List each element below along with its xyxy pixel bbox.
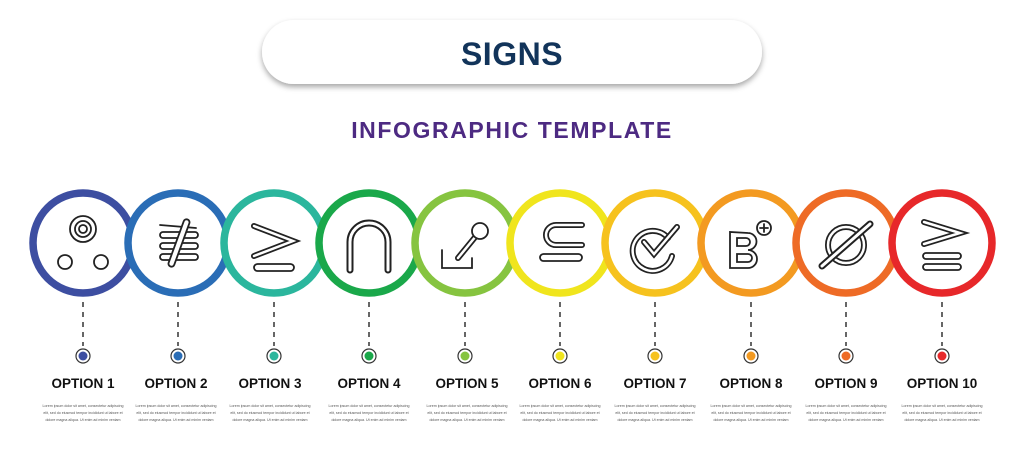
description texts: dolore magna aliqua. Ut enim ad minim veniam bbox=[331, 418, 407, 422]
option labels: OPTION 5 bbox=[435, 376, 499, 391]
description texts: dolore magna aliqua. Ut enim ad minim veniam bbox=[232, 418, 308, 422]
description texts: dolore magna aliqua. Ut enim ad minim veniam bbox=[713, 418, 789, 422]
description texts: dolore magna aliqua. Ut enim ad minim veniam bbox=[429, 418, 505, 422]
option labels: OPTION 8 bbox=[719, 376, 783, 391]
description texts: elit, sed do eiusmod tempor incididunt ut labore et bbox=[711, 411, 791, 415]
description texts: Lorem ipsum dolor sit amet, consectetur adipiscing bbox=[230, 404, 310, 408]
description texts: Lorem ipsum dolor sit amet, consectetur adipiscing bbox=[902, 404, 982, 408]
description texts: elit, sed do eiusmod tempor incididunt ut labore et bbox=[329, 411, 409, 415]
description texts: dolore magna aliqua. Ut enim ad minim veniam bbox=[522, 418, 598, 422]
icon 3: greater or equal bbox=[254, 226, 294, 271]
connectors and dots bbox=[76, 302, 949, 363]
description texts: Lorem ipsum dolor sit amet, consectetur adipiscing bbox=[136, 404, 216, 408]
description texts: Lorem ipsum dolor sit amet, consectetur adipiscing bbox=[711, 404, 791, 408]
description texts: Lorem ipsum dolor sit amet, consectetur adipiscing bbox=[427, 404, 507, 408]
option labels: OPTION 2 bbox=[144, 376, 208, 391]
description texts: dolore magna aliqua. Ut enim ad minim veniam bbox=[617, 418, 693, 422]
description texts: elit, sed do eiusmod tempor incididunt ut labore et bbox=[806, 411, 886, 415]
description texts: dolore magna aliqua. Ut enim ad minim veniam bbox=[808, 418, 884, 422]
description texts: Lorem ipsum dolor sit amet, consectetur adipiscing bbox=[615, 404, 695, 408]
description texts: elit, sed do eiusmod tempor incididunt ut labore et bbox=[136, 411, 216, 415]
icons bbox=[58, 216, 961, 271]
description texts: elit, sed do eiusmod tempor incididunt ut labore et bbox=[520, 411, 600, 415]
option labels: OPTION 6 bbox=[528, 376, 592, 391]
option labels: OPTION 10 bbox=[907, 376, 977, 391]
description texts: Lorem ipsum dolor sit amet, consectetur adipiscing bbox=[806, 404, 886, 408]
icon 2: not equivalent bbox=[160, 218, 198, 268]
option labels: OPTION 7 bbox=[623, 376, 687, 391]
description texts: dolore magna aliqua. Ut enim ad minim veniam bbox=[45, 418, 121, 422]
option labels: OPTION 9 bbox=[814, 376, 878, 391]
icon 9: empty set bbox=[822, 224, 870, 266]
description texts: Lorem ipsum dolor sit amet, consectetur adipiscing bbox=[329, 404, 409, 408]
description texts bbox=[43, 404, 982, 422]
description texts: elit, sed do eiusmod tempor incididunt ut labore et bbox=[615, 411, 695, 415]
description texts: dolore magna aliqua. Ut enim ad minim veniam bbox=[138, 418, 214, 422]
description texts: elit, sed do eiusmod tempor incididunt ut labore et bbox=[230, 411, 310, 415]
subtitle: INFOGRAPHIC TEMPLATE bbox=[351, 117, 673, 143]
title pill bbox=[262, 20, 762, 84]
option labels bbox=[51, 376, 977, 391]
option labels: OPTION 3 bbox=[238, 376, 302, 391]
icon 1: circles bbox=[58, 216, 108, 269]
description texts: elit, sed do eiusmod tempor incididunt ut labore et bbox=[43, 411, 123, 415]
description texts: elit, sed do eiusmod tempor incididunt ut labore et bbox=[427, 411, 507, 415]
icon 5: joystick bbox=[442, 223, 488, 268]
description texts: Lorem ipsum dolor sit amet, consectetur adipiscing bbox=[520, 404, 600, 408]
description texts: dolore magna aliqua. Ut enim ad minim veniam bbox=[904, 418, 980, 422]
title pill: SIGNS bbox=[461, 36, 563, 72]
icon 4: intersection bbox=[350, 223, 388, 270]
option labels: OPTION 1 bbox=[51, 376, 115, 391]
icon 8: B plus bbox=[730, 221, 771, 268]
icon 10: greater equal double bbox=[923, 222, 961, 270]
icon 6: subset equal bbox=[540, 225, 582, 261]
circles ring bbox=[33, 193, 992, 293]
description texts: elit, sed do eiusmod tempor incididunt ut labore et bbox=[902, 411, 982, 415]
description texts: Lorem ipsum dolor sit amet, consectetur adipiscing bbox=[43, 404, 123, 408]
option labels: OPTION 4 bbox=[337, 376, 401, 391]
icon 7: check bbox=[633, 227, 677, 271]
